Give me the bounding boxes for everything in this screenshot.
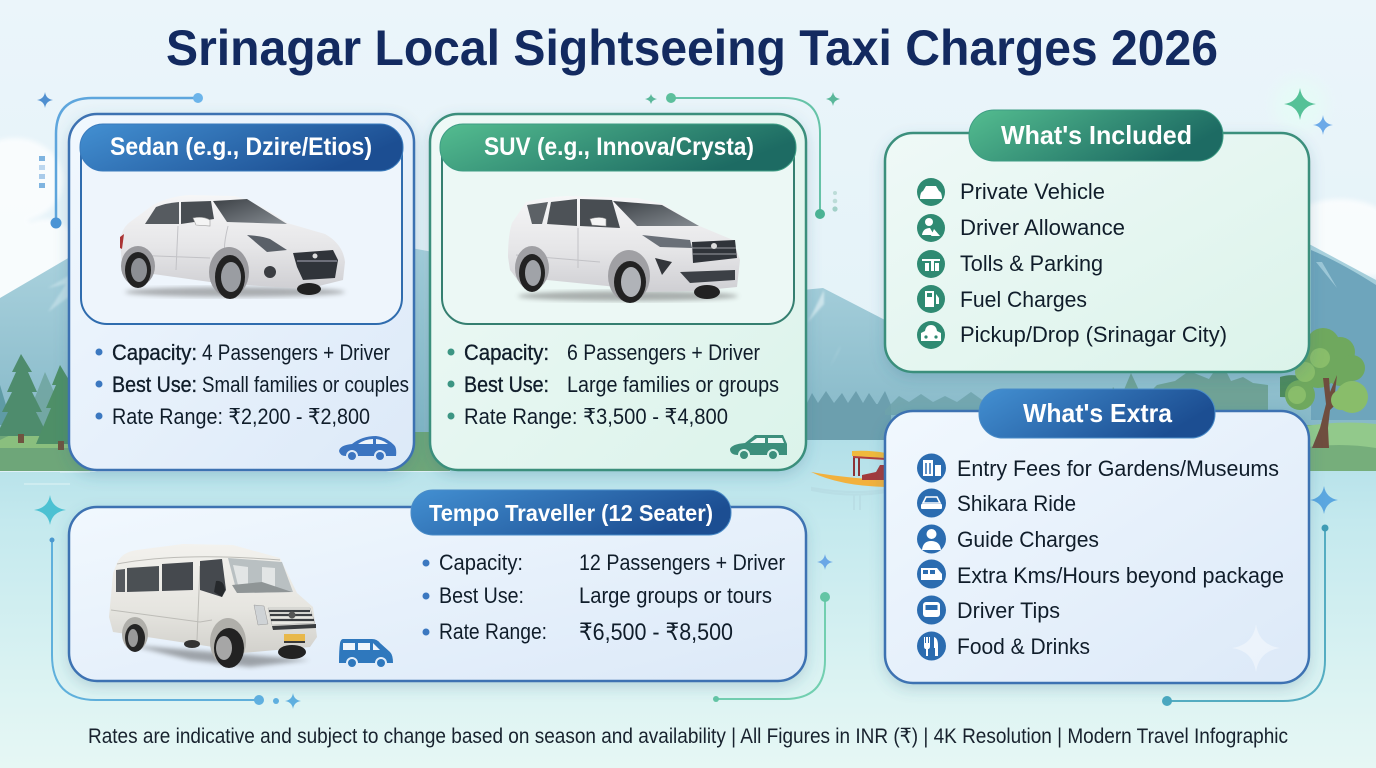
extra list: Driver Tips — [957, 598, 1060, 623]
panel: what's extra — [885, 389, 1309, 683]
sedan specs: Capacity: — [112, 340, 197, 365]
tempo van photo — [109, 544, 317, 668]
SUV specs: Rate Range: ₹3,500 - ₹4,800 — [464, 404, 728, 429]
sedan specs: Rate Range: ₹2,200 - ₹2,800 — [112, 404, 370, 429]
sparkles and dots — [34, 79, 1338, 709]
panel: sedan — [69, 114, 414, 470]
included list: Private Vehicle — [960, 179, 1105, 204]
tempo specs: ₹6,500 - ₹8,500 — [579, 619, 733, 646]
included list: Pickup/Drop (Srinagar City) — [960, 322, 1227, 347]
tempo specs — [422, 550, 785, 646]
extra icons — [917, 454, 946, 660]
sedan heading: Sedan (e.g., Dzire/Etios) — [110, 133, 372, 161]
sedan specs: Best Use: — [112, 372, 197, 397]
sedan heading — [80, 124, 403, 171]
tempo heading: Tempo Traveller (12 Seater) — [429, 500, 713, 526]
title: Srinagar Local Sightseeing Taxi Charges 2026 — [166, 20, 1218, 76]
tempo specs: Rate Range: — [439, 619, 547, 644]
included icons — [917, 178, 945, 349]
tempo specs: Capacity: — [439, 550, 523, 575]
SUV car photo — [508, 196, 740, 303]
sparkle watermark — [1232, 624, 1280, 672]
sedan specs: Small families or couples — [202, 372, 409, 397]
included list: Driver Allowance — [960, 215, 1125, 240]
SUV heading: SUV (e.g., Innova/Crysta) — [484, 133, 754, 161]
connector: bottom middle — [713, 592, 830, 702]
tree right — [1280, 328, 1368, 448]
extra list: Food & Drinks — [957, 634, 1090, 659]
SUV specs: Large families or groups — [567, 372, 779, 397]
sedan specs: 4 Passengers + Driver — [202, 340, 390, 365]
tempo specs: Best Use: — [439, 583, 524, 608]
panel: what's included — [885, 110, 1309, 372]
icon: van — [339, 639, 393, 667]
panel: tempo traveller — [69, 490, 806, 681]
sedan car photo — [120, 195, 345, 299]
connector: top middle — [666, 93, 825, 219]
tempo specs: 12 Passengers + Driver — [579, 550, 785, 575]
extra list: Shikara Ride — [957, 491, 1076, 516]
SUV specs: Best Use: — [464, 372, 549, 397]
included heading: What's Included — [1001, 120, 1192, 150]
included list — [960, 179, 1227, 347]
trees left — [0, 354, 72, 450]
SUV specs: Capacity: — [464, 340, 549, 365]
extra list: Extra Kms/Hours beyond package — [957, 563, 1284, 588]
SUV specs — [448, 340, 779, 429]
sedan specs — [96, 340, 409, 429]
included heading — [969, 110, 1223, 161]
extra list: Guide Charges — [957, 527, 1099, 552]
icon: SUV — [730, 435, 787, 459]
panel: SUV — [430, 114, 806, 470]
connector: bottom right — [1162, 524, 1328, 706]
included list: Tolls & Parking — [960, 251, 1103, 276]
tempo specs: Large groups or tours — [579, 583, 772, 608]
icon: sedan — [339, 436, 396, 460]
sedan image frame — [81, 130, 402, 324]
included list: Fuel Charges — [960, 287, 1087, 312]
extra heading: What's Extra — [1023, 398, 1173, 428]
SUV heading — [440, 124, 796, 171]
extra heading — [979, 389, 1215, 438]
SUV image frame — [442, 130, 794, 324]
tempo heading — [411, 490, 731, 535]
connector: top left — [50, 93, 203, 228]
footer note: Rates are indicative and subject to change based on season and availability | All Figures in INR (₹) | 4K Resolution | Modern Travel Infographic — [88, 725, 1288, 748]
connector: bottom left — [50, 538, 279, 705]
extra list — [957, 456, 1284, 659]
SUV specs: 6 Passengers + Driver — [567, 340, 760, 365]
shikara boat — [811, 451, 886, 510]
extra list: Entry Fees for Gardens/Museums — [957, 456, 1279, 481]
